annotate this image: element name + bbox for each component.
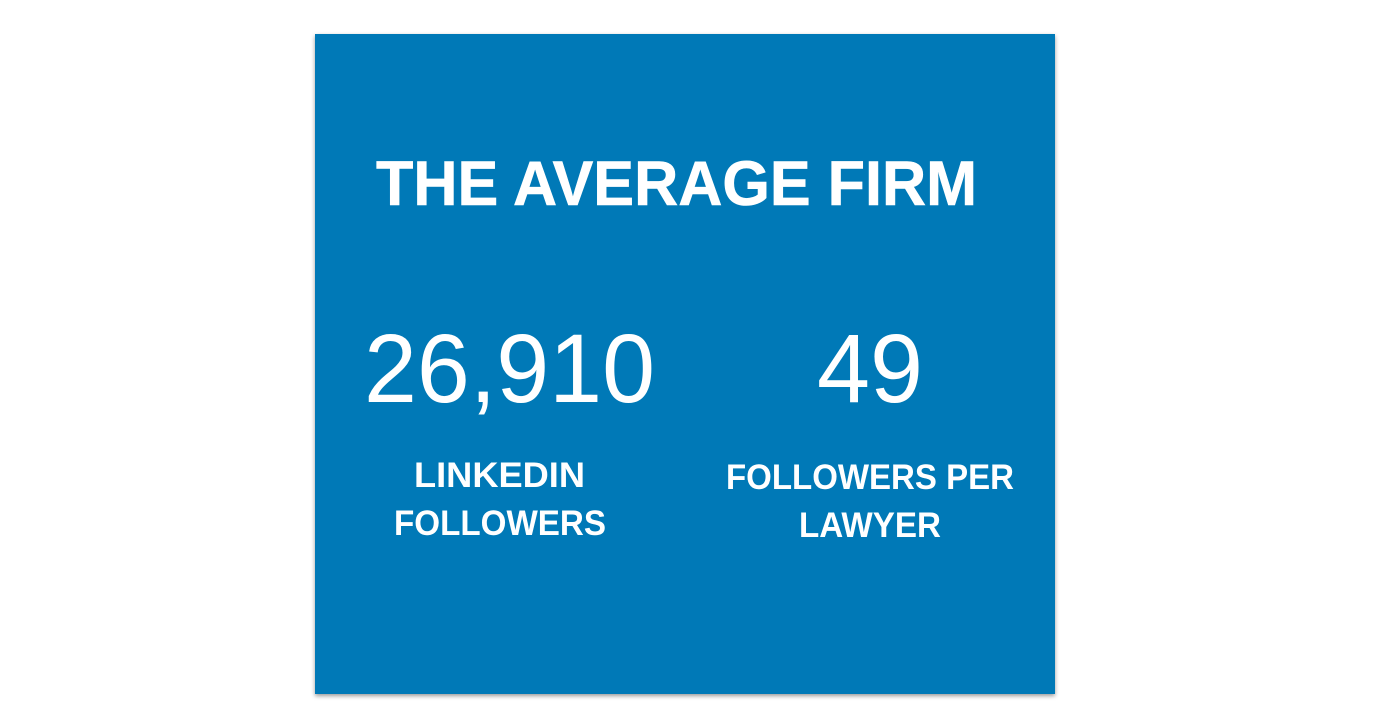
stat: LinkedIn followers xyxy=(364,314,655,543)
stat: followers per lawyer xyxy=(726,314,1014,545)
panel: average firm card xyxy=(315,34,1055,694)
label: followers per lawyer xyxy=(726,458,1014,545)
label: LinkedIn followers: LINKEDIN xyxy=(414,456,585,495)
number: 49: 49 xyxy=(817,314,923,423)
label: LinkedIn followers xyxy=(394,456,606,543)
label: LinkedIn followers: FOLLOWERS xyxy=(394,504,606,543)
title: THE AVERAGE FIRM xyxy=(376,149,977,219)
label: followers per lawyer: FOLLOWERS PER xyxy=(726,458,1014,497)
label: followers per lawyer: LAWYER xyxy=(799,506,941,545)
number: 26,910: 26,910 xyxy=(364,314,655,423)
